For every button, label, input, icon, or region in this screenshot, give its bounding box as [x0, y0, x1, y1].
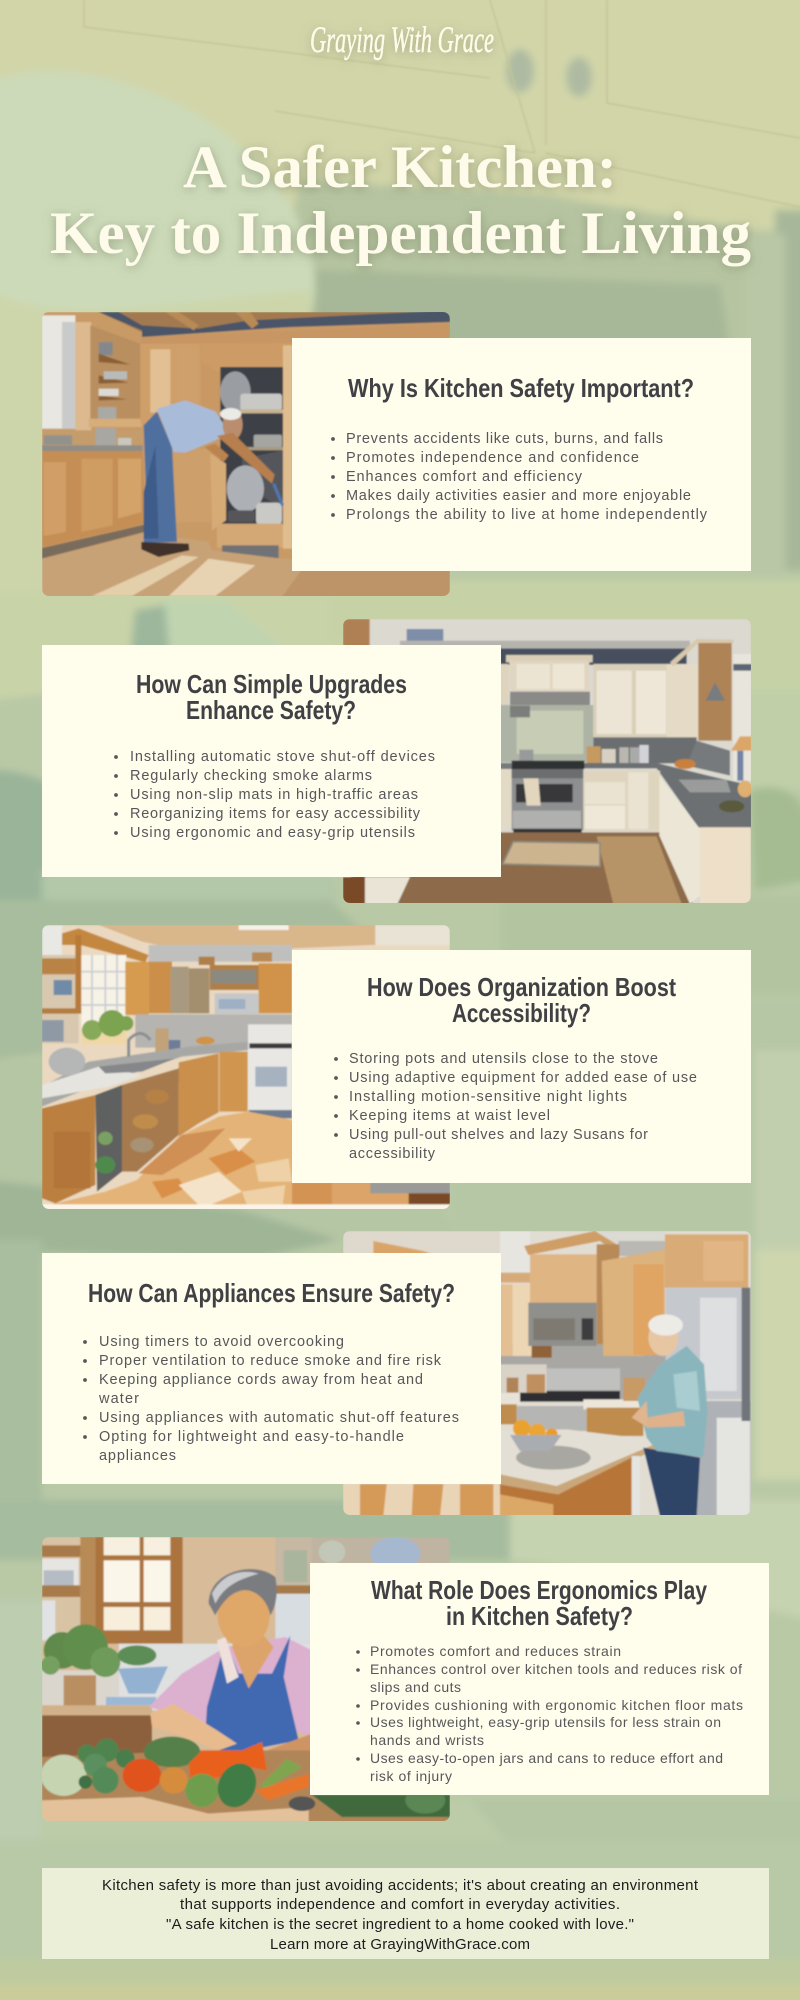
- heading: [367, 972, 676, 1028]
- bullet list: risk of injury: [370, 1768, 452, 1784]
- bullet list: [334, 1051, 697, 1162]
- footer callout: Kitchen safety is more than just avoiding accidents; it's about creating an environment: [102, 1877, 699, 1894]
- bullet list: hands and wrists: [370, 1732, 484, 1748]
- heading: Accessibility?: [452, 998, 591, 1028]
- bullet list: Using non-slip mats in high-traffic areas: [130, 787, 418, 803]
- title: Key to Independent Living: [50, 200, 751, 266]
- footer callout: [42, 1868, 769, 1959]
- bullet list: Proper ventilation to reduce smoke and fire risk: [99, 1353, 442, 1369]
- bullet list: appliances: [99, 1448, 176, 1464]
- bullet list: [331, 431, 708, 523]
- bullet list: Uses easy-to-open jars and cans to reduce effort and: [370, 1750, 723, 1766]
- illustration: woman chopping vegetables: [41, 1537, 450, 1822]
- bullet list: Using adaptive equipment for added ease of use: [349, 1070, 697, 1086]
- bullet list: Uses lightweight, easy-grip utensils for less strain on: [370, 1714, 721, 1730]
- bullet list: Using pull-out shelves and lazy Susans for: [349, 1127, 648, 1143]
- bullet list: Promotes independence and confidence: [346, 450, 639, 466]
- bullet list: [114, 749, 435, 841]
- illustration: cream cabinet kitchen: [343, 619, 752, 906]
- logo: Graying With Grace: Graying With Grace: [310, 20, 494, 61]
- bullet list: Using ergonomic and easy-grip utensils: [130, 825, 415, 841]
- bullet list: Installing motion-sensitive night lights: [349, 1089, 627, 1105]
- title: A Safer Kitchen:: [183, 134, 617, 200]
- footer callout: that supports independence and comfort in everyday activities.: [180, 1896, 620, 1913]
- illustration: older woman standing at counter: [343, 1231, 751, 1516]
- heading: How Does Organization Boost: [367, 972, 676, 1002]
- footer callout: Learn more at GrayingWithGrace.com: [270, 1936, 530, 1953]
- bullet list: [83, 1334, 459, 1464]
- bullet list: Storing pots and utensils close to the stove: [349, 1051, 658, 1067]
- bullet list: Installing automatic stove shut-off devices: [130, 749, 435, 765]
- title: [50, 134, 751, 266]
- heading: Enhance Safety?: [186, 695, 356, 725]
- bullet list: accessibility: [349, 1146, 436, 1162]
- heading: How Can Simple Upgrades: [136, 669, 407, 699]
- heading: Why Is Kitchen Safety Important?: [348, 373, 694, 403]
- bullet list: Using timers to avoid overcooking: [99, 1334, 344, 1350]
- bullet list: Provides cushioning with ergonomic kitchen floor mats: [370, 1697, 743, 1713]
- illustration: man reaching into lower cabinet: [42, 310, 450, 597]
- bullet list: Makes daily activities easier and more enjoyable: [346, 488, 691, 504]
- panel: ergonomics: [310, 1563, 769, 1795]
- bullet list: Prevents accidents like cuts, burns, and falls: [346, 431, 663, 447]
- bullet list: Enhances comfort and efficiency: [346, 469, 583, 485]
- bullet list: water: [98, 1391, 139, 1407]
- bullet list: Opting for lightweight and easy-to-handle: [99, 1429, 404, 1445]
- bullet list: slips and cuts: [370, 1679, 461, 1695]
- bullet list: Prolongs the ability to live at home independently: [346, 507, 708, 523]
- bullet list: Keeping items at waist level: [349, 1108, 550, 1124]
- heading: in Kitchen Safety?: [446, 1601, 633, 1631]
- footer callout: "A safe kitchen is the secret ingredient to a home cooked with love.": [166, 1916, 634, 1933]
- panel: why kitchen safety matters: [292, 338, 751, 571]
- heading: [136, 669, 407, 725]
- panel: organization and accessibility: [292, 950, 751, 1183]
- bullet list: Enhances control over kitchen tools and reduces risk of: [370, 1661, 742, 1677]
- panel: appliance safety: [42, 1253, 501, 1484]
- illustration: wooden kitchen with tiled floor: [42, 925, 450, 1210]
- bullet list: [356, 1643, 743, 1784]
- bullet list: Regularly checking smoke alarms: [130, 768, 372, 784]
- bullet list: Promotes comfort and reduces strain: [370, 1643, 621, 1659]
- bullet list: Reorganizing items for easy accessibility: [130, 806, 421, 822]
- heading: [371, 1575, 707, 1631]
- panel: simple upgrades: [42, 645, 501, 877]
- heading: What Role Does Ergonomics Play: [371, 1575, 707, 1605]
- bullet list: Using appliances with automatic shut-off features: [99, 1410, 459, 1426]
- bullet list: Keeping appliance cords away from heat and: [99, 1372, 423, 1388]
- heading: How Can Appliances Ensure Safety?: [88, 1278, 455, 1308]
